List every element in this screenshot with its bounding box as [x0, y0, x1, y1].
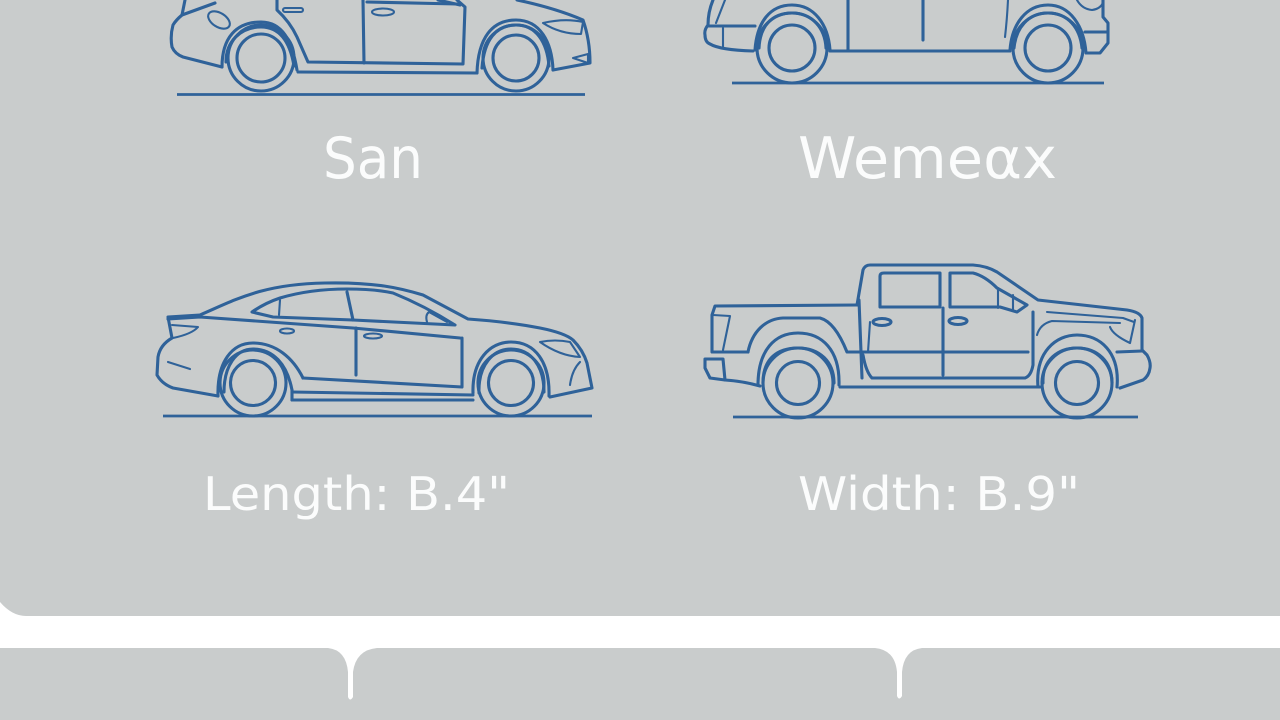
- icon: top sedan: [171, 0, 590, 91]
- ground line: top sedan: [177, 93, 585, 96]
- ground line: bottom truck: [733, 416, 1138, 418]
- ground line: bottom sedan: [163, 415, 592, 417]
- ground line: top truck: [732, 82, 1104, 84]
- heading: Wemeax: Wemeαx: [798, 126, 1057, 192]
- text: length spec: Length: B.4": [203, 467, 510, 521]
- heading: San: San: [323, 126, 423, 192]
- text: width spec: Width: B.9": [798, 467, 1080, 521]
- panel: bottom cards: [0, 648, 1280, 720]
- icon: bottom sedan: [157, 283, 592, 416]
- icon: bottom pickup truck: [705, 265, 1150, 418]
- icon: top pickup truck: [705, 0, 1108, 83]
